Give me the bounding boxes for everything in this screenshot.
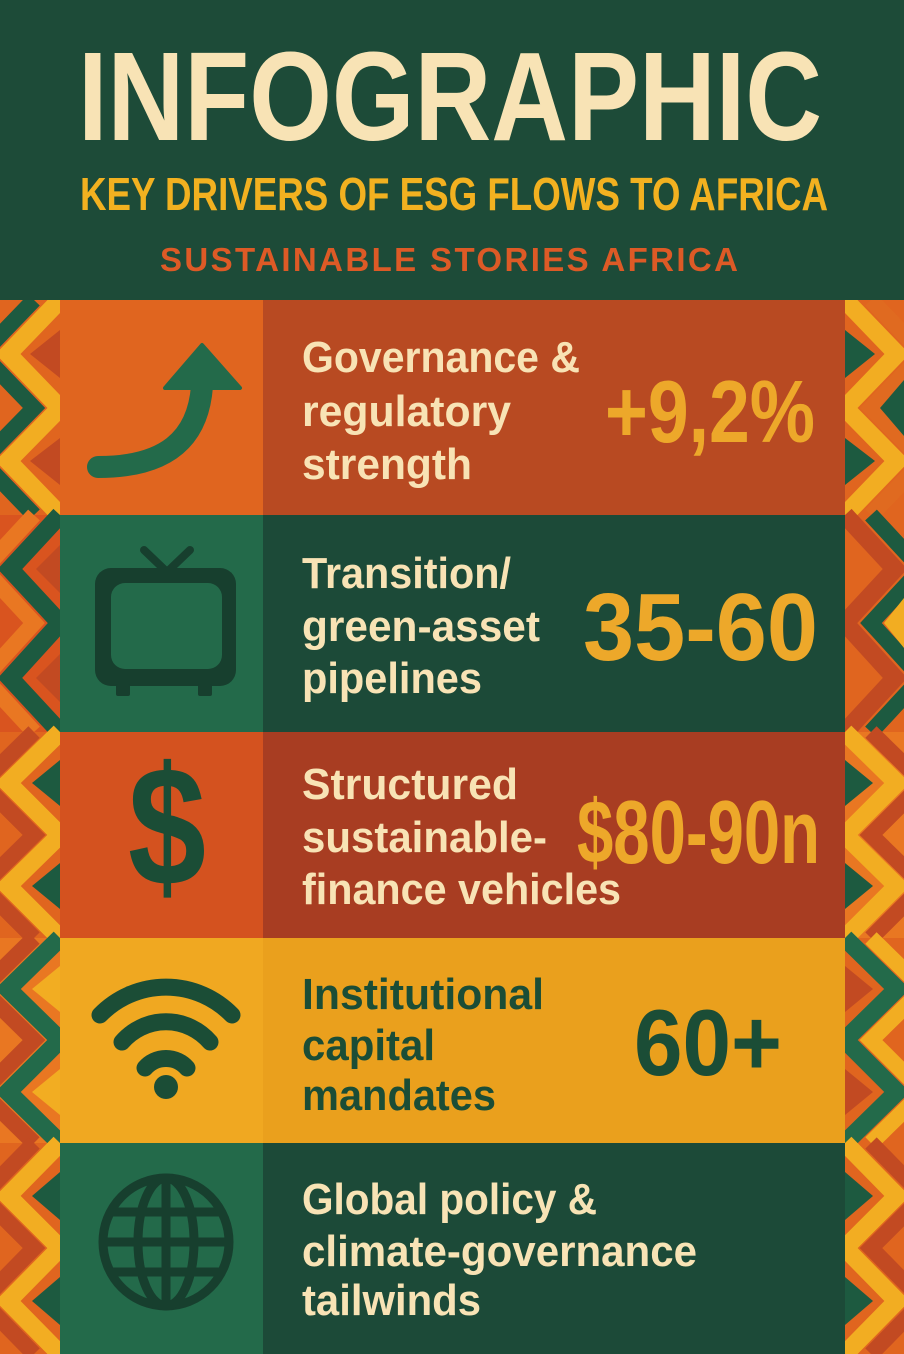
label: transition xyxy=(302,549,540,703)
label: governance xyxy=(302,333,580,489)
icon: tv xyxy=(95,550,236,696)
label: governance: regulatory xyxy=(302,387,512,436)
label: transition: green-asset xyxy=(302,602,540,651)
label: structured: finance vehicles xyxy=(302,865,621,914)
label: global policy xyxy=(302,1175,697,1325)
stat: 60+: 60+ xyxy=(634,990,782,1095)
label: structured: sustainable- xyxy=(302,813,547,862)
label: global policy: climate-governance xyxy=(302,1227,697,1276)
row 3: structured finance xyxy=(60,732,845,938)
row 2: transition xyxy=(60,515,845,732)
stat: $80-90n: $80-90n xyxy=(577,783,820,883)
row 4: institutional capital xyxy=(60,938,845,1143)
icon: dollar: $ xyxy=(128,732,206,922)
stat: +9,2%: +9,2% xyxy=(605,362,815,461)
left border pattern xyxy=(0,300,60,1354)
stat: 35-60: 35-60 xyxy=(583,574,818,681)
label: institutional: capital xyxy=(302,1021,435,1070)
brand line: SUSTAINABLE STORIES AFRICA xyxy=(160,241,738,278)
label: institutional: mandates xyxy=(302,1071,496,1120)
icon: wifi xyxy=(100,987,232,1099)
label: global policy: Global policy & xyxy=(302,1175,597,1224)
right border pattern xyxy=(845,300,904,1354)
label: governance: strength xyxy=(302,440,472,489)
label: structured: Structured xyxy=(302,760,518,809)
label: governance: Governance & xyxy=(302,333,580,382)
label: transition: pipelines xyxy=(302,654,482,703)
label: institutional xyxy=(302,970,544,1120)
label: institutional: Institutional xyxy=(302,970,544,1019)
label: structured xyxy=(302,760,621,914)
row 5: global policy xyxy=(60,1143,845,1354)
icon: rising arrow xyxy=(98,345,240,467)
header panel xyxy=(0,0,904,300)
icon: globe xyxy=(103,1178,229,1306)
label: global policy: tailwinds xyxy=(302,1276,481,1325)
row 1: governance xyxy=(60,300,845,515)
label: transition: Transition/ xyxy=(302,549,511,598)
